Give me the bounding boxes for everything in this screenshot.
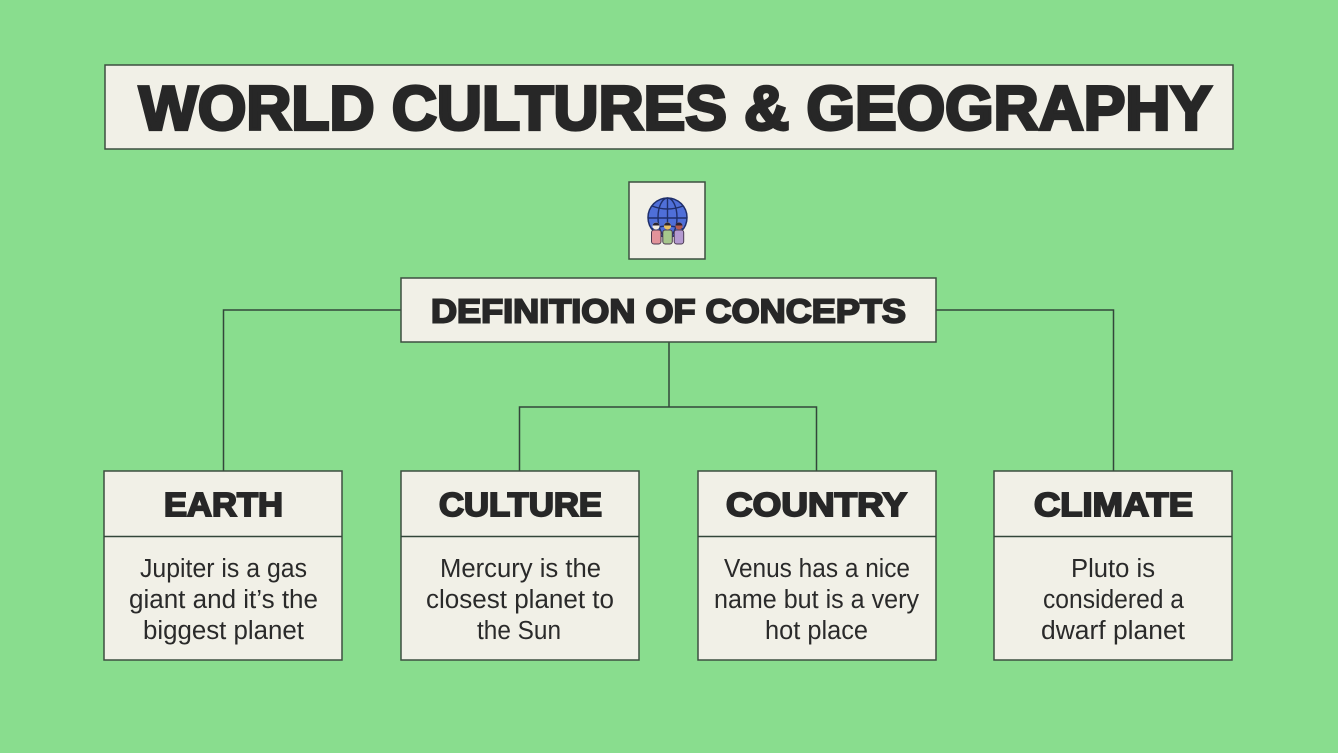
panel: country: hot place [765,617,868,645]
panel: climate [994,471,1232,660]
panel: climate: Pluto is [1071,555,1155,583]
heading: definition of concepts: DEFINITION OF CONCEPTS [431,292,906,330]
panel: earth: biggest planet [143,617,304,645]
panel: country: Venus has a nice [724,555,910,583]
panel: earth: Jupiter is a gas [140,555,307,583]
title: WORLD CULTURES & GEOGRAPHY [139,74,1212,144]
panel: climate: considered a [1043,586,1185,614]
panel: culture [401,471,639,660]
panel: culture: CULTURE [439,486,602,523]
panel: culture: Mercury is the [440,555,601,583]
panel: climate: CLIMATE [1034,486,1193,523]
panel: climate: dwarf planet [1041,617,1185,645]
heading: definition of concepts [401,278,936,342]
panel: earth: giant and it’s the [129,586,318,614]
panel: country [698,471,936,660]
panel: culture: closest planet to [426,586,614,614]
panel: country: COUNTRY [726,486,907,523]
panel: country: name but is a very [714,586,919,614]
connector lines [224,310,1114,471]
panel: earth [104,471,342,660]
panel: earth: EARTH [164,486,283,523]
icon: globe with people [629,182,705,259]
panel: culture: the Sun [477,617,561,645]
